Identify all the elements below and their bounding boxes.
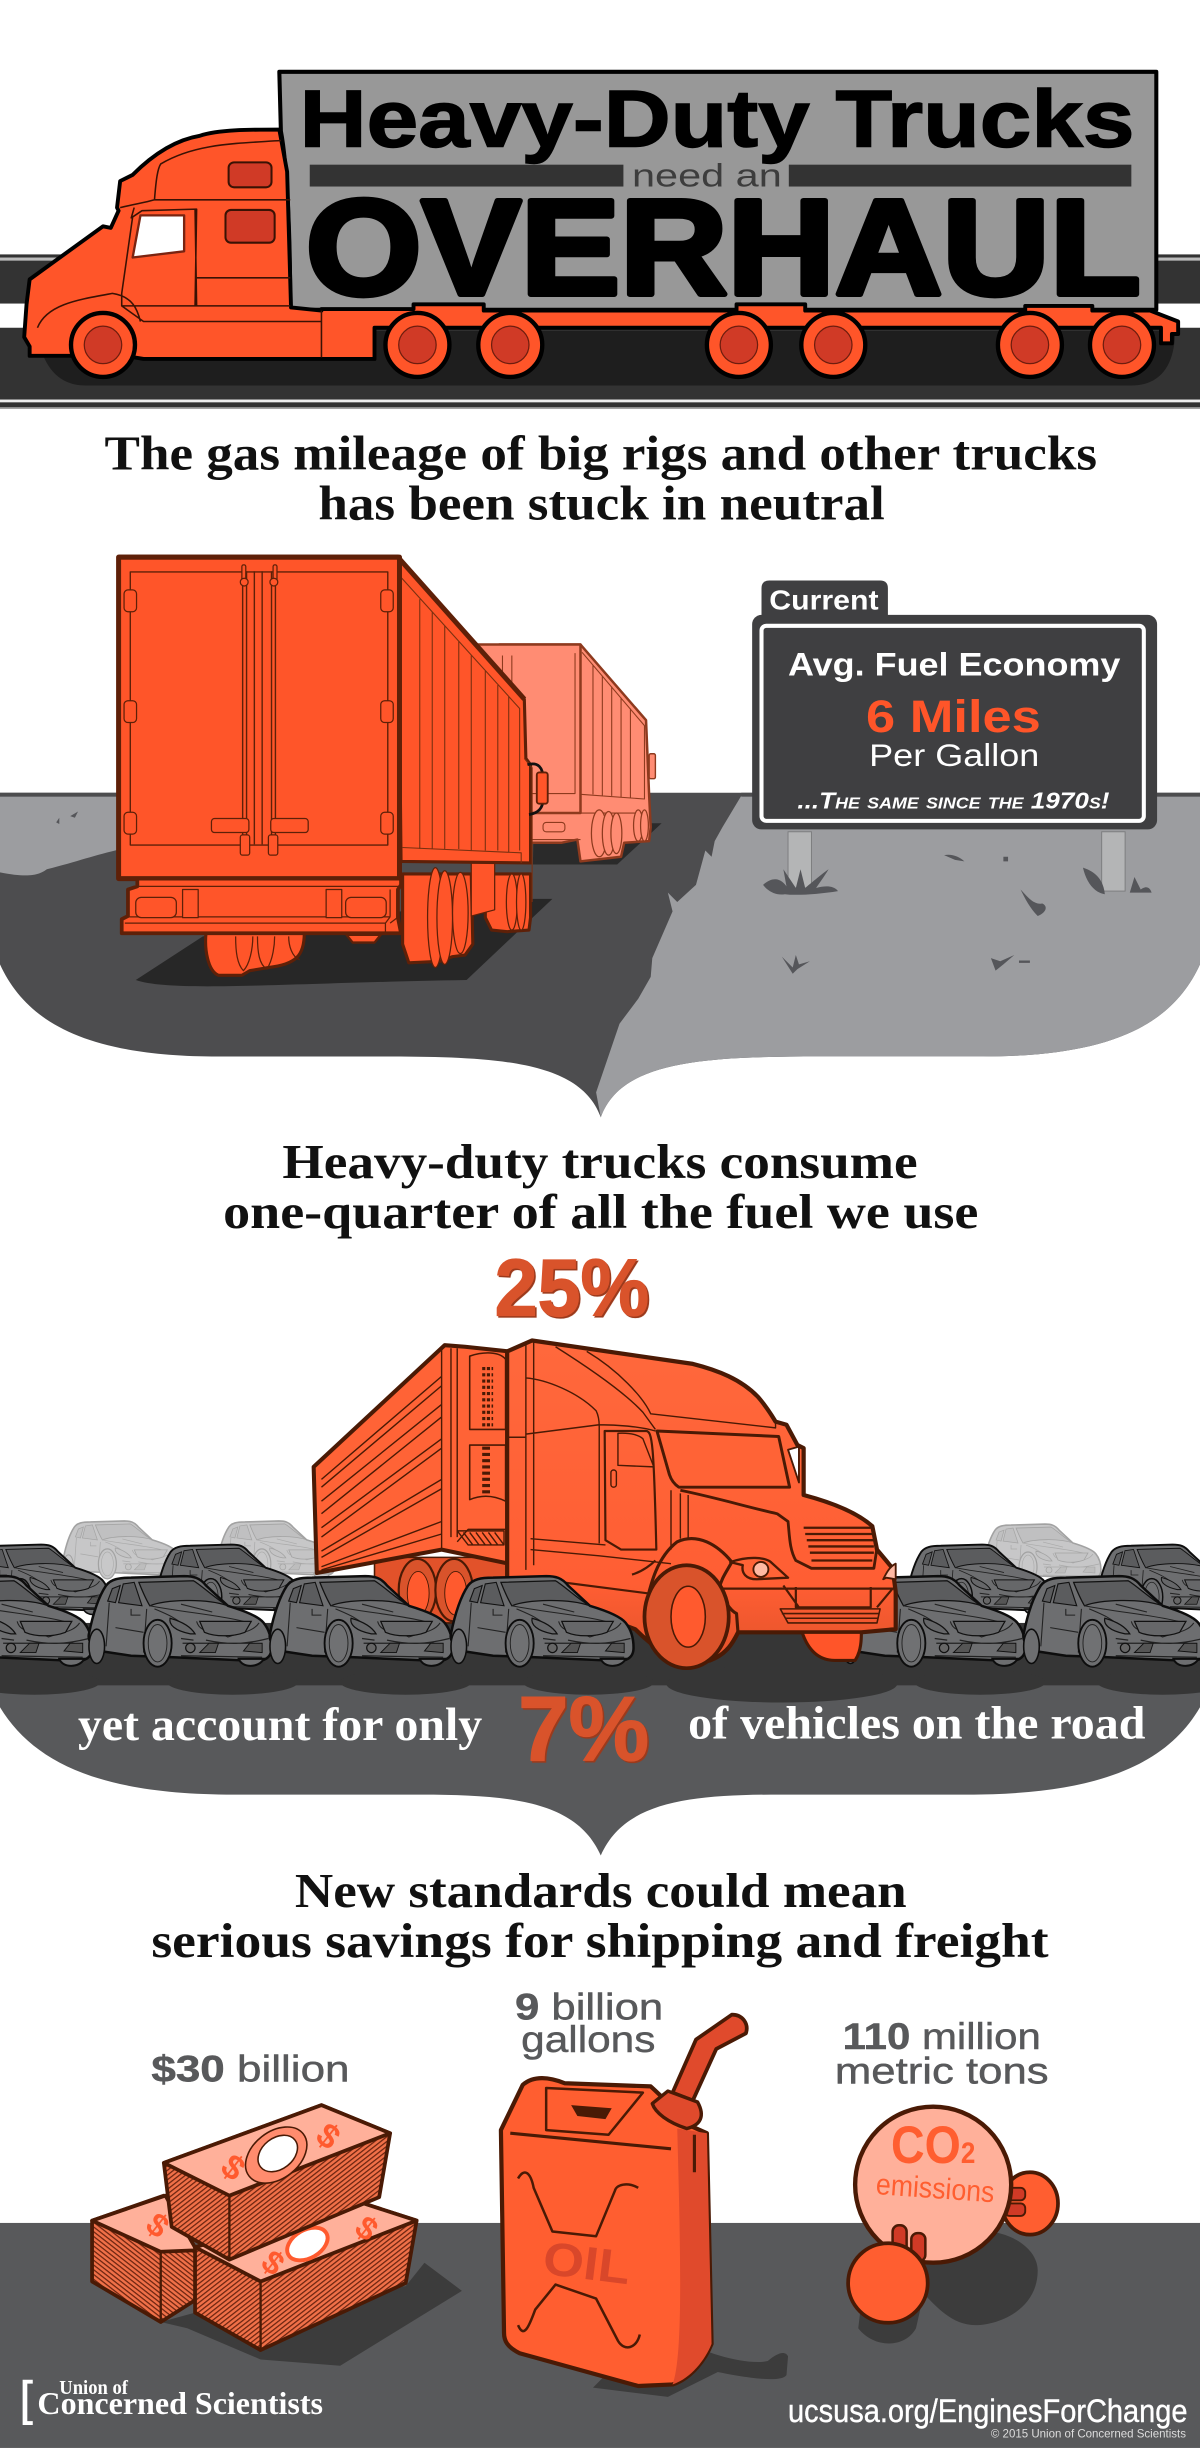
rear wheels bbox=[399, 1559, 436, 1621]
far truck bbox=[468, 645, 662, 865]
heading: savings: New standards could mean bbox=[295, 1865, 907, 1918]
icon: CO2 molecule bbox=[848, 2107, 1058, 2343]
heading: quarter of fuel: Heavy-duty trucks consume bbox=[282, 1136, 918, 1189]
right stack bbox=[195, 2202, 417, 2350]
sign bbox=[56, 581, 1157, 974]
road text: of vehicles on the road bbox=[688, 1697, 1145, 1749]
connectors bbox=[893, 2225, 907, 2256]
money shadow bbox=[161, 2263, 462, 2366]
sign board bbox=[752, 615, 1157, 829]
stat: 7%: 7% bbox=[518, 1677, 649, 1780]
bottom atom bbox=[848, 2243, 928, 2323]
mirror bbox=[527, 764, 543, 815]
panel: savings ground bbox=[0, 2223, 1200, 2448]
heading: gas mileage: The gas mileage of big rigs and other trucks bbox=[105, 428, 1097, 481]
molecule shadow bbox=[858, 2231, 1038, 2343]
truck wheels bbox=[206, 863, 531, 975]
CO2 text: CO2 bbox=[891, 2116, 975, 2175]
sign text: Per Gallon bbox=[869, 738, 1039, 773]
front row cars bbox=[0, 1576, 634, 1667]
chassis bbox=[122, 879, 401, 933]
grille bbox=[804, 1528, 874, 1561]
can spout bbox=[673, 2015, 747, 2100]
sign text: Avg. Fuel Economy bbox=[788, 647, 1121, 683]
heading: quarter of fuel: one-quarter of all the fuel we use bbox=[223, 1186, 978, 1239]
can body bbox=[501, 2078, 712, 2386]
heading: gas mileage bbox=[105, 428, 1097, 531]
heading: quarter of fuel bbox=[223, 1136, 978, 1239]
cab body bbox=[507, 1340, 896, 1665]
left stack bbox=[92, 2196, 197, 2322]
icon: oil can bbox=[501, 2015, 788, 2397]
rear door panel bbox=[119, 557, 399, 879]
emissions text: emissions bbox=[875, 2168, 996, 2209]
icon: money stacks: $ bbox=[309, 2116, 347, 2158]
logo: Union of Concerned Scientists: Concerned Scientists bbox=[37, 2386, 323, 2421]
trailer bbox=[314, 1345, 509, 1573]
faint cars bbox=[63, 1521, 1101, 1582]
sign tab bbox=[762, 581, 888, 618]
panel: road and stuck trucks bbox=[0, 557, 1200, 1117]
panel: trucks versus cars bbox=[0, 1340, 1200, 1855]
stat: 110 million metric tons: metric tons bbox=[835, 2049, 1049, 2091]
truck trailer title box bbox=[279, 72, 1156, 310]
headlight bbox=[730, 1558, 788, 1579]
big truck bbox=[314, 1340, 896, 1668]
panel: header truck bbox=[0, 72, 1200, 409]
can cap bbox=[652, 2091, 701, 2129]
title bbox=[300, 75, 1141, 323]
sign text bbox=[769, 584, 1121, 813]
road text: yet account for only bbox=[78, 1699, 482, 1751]
trailer side bbox=[398, 557, 531, 863]
icon: money stacks: $ bbox=[139, 2205, 176, 2245]
stat: 30 billion: $30 billion bbox=[151, 2048, 350, 2090]
logo: Union of Concerned Scientists: Union of bbox=[59, 2378, 128, 2399]
stat: 9 billion gallons: 9 billion bbox=[515, 1985, 663, 2027]
sign text: 6 Miles bbox=[866, 691, 1041, 742]
copyright: © 2015 Union of Concerned Scientists bbox=[991, 2427, 1186, 2440]
heading: gas mileage: has been stuck in neutral bbox=[318, 478, 885, 531]
front wheels bbox=[802, 1632, 861, 1660]
title: OVERHAUL bbox=[306, 171, 1141, 323]
stat: 110 million metric tons: 110 million bbox=[843, 2015, 1041, 2057]
sign text: ...The same since the 1970s! bbox=[797, 787, 1110, 813]
grass bbox=[56, 811, 1152, 974]
right atom bbox=[1002, 2172, 1058, 2235]
sign text: Current bbox=[769, 584, 879, 615]
heading: savings bbox=[151, 1865, 1049, 1968]
title: Heavy-Duty Trucks bbox=[300, 75, 1134, 165]
heading: savings: serious savings for shipping and freight bbox=[151, 1915, 1049, 1968]
title: need an bbox=[632, 157, 782, 194]
stat: 9 billion gallons: gallons bbox=[521, 2018, 655, 2060]
can shadow bbox=[593, 2341, 788, 2397]
icon: oil can: OIL bbox=[540, 2232, 633, 2294]
car behind truck bbox=[842, 1576, 1025, 1667]
sign inner border bbox=[762, 626, 1144, 821]
road text bbox=[78, 1697, 1145, 1751]
icon: money stacks: $ bbox=[348, 2208, 385, 2248]
right side front car bbox=[1023, 1576, 1200, 1667]
big circle bbox=[855, 2107, 1011, 2263]
second row cars bbox=[0, 1545, 1200, 1615]
top stack bbox=[164, 2105, 390, 2260]
road band bbox=[0, 1623, 1200, 1855]
icon: money stacks: $ bbox=[255, 2242, 292, 2283]
ground bbox=[0, 793, 1200, 1117]
truck shadow bbox=[136, 899, 552, 986]
truck frame and cab bbox=[24, 130, 1178, 359]
stat: 110 million metric tons bbox=[835, 2015, 1049, 2091]
icon: money stacks: $ bbox=[214, 2147, 252, 2189]
stat: 25%: 25% bbox=[495, 1244, 649, 1334]
sign posts bbox=[788, 832, 1125, 891]
wheels bbox=[71, 313, 1154, 377]
icon: money stacks bbox=[92, 2105, 462, 2366]
vent panels bbox=[457, 1353, 506, 1545]
near truck bbox=[119, 557, 552, 986]
cab lines bbox=[507, 1342, 776, 1570]
bumper vents bbox=[780, 1609, 880, 1623]
fender bbox=[646, 1539, 738, 1634]
road bbox=[0, 254, 1200, 409]
undercarriage bbox=[375, 1557, 538, 1623]
stat: 9 billion gallons bbox=[515, 1985, 663, 2060]
